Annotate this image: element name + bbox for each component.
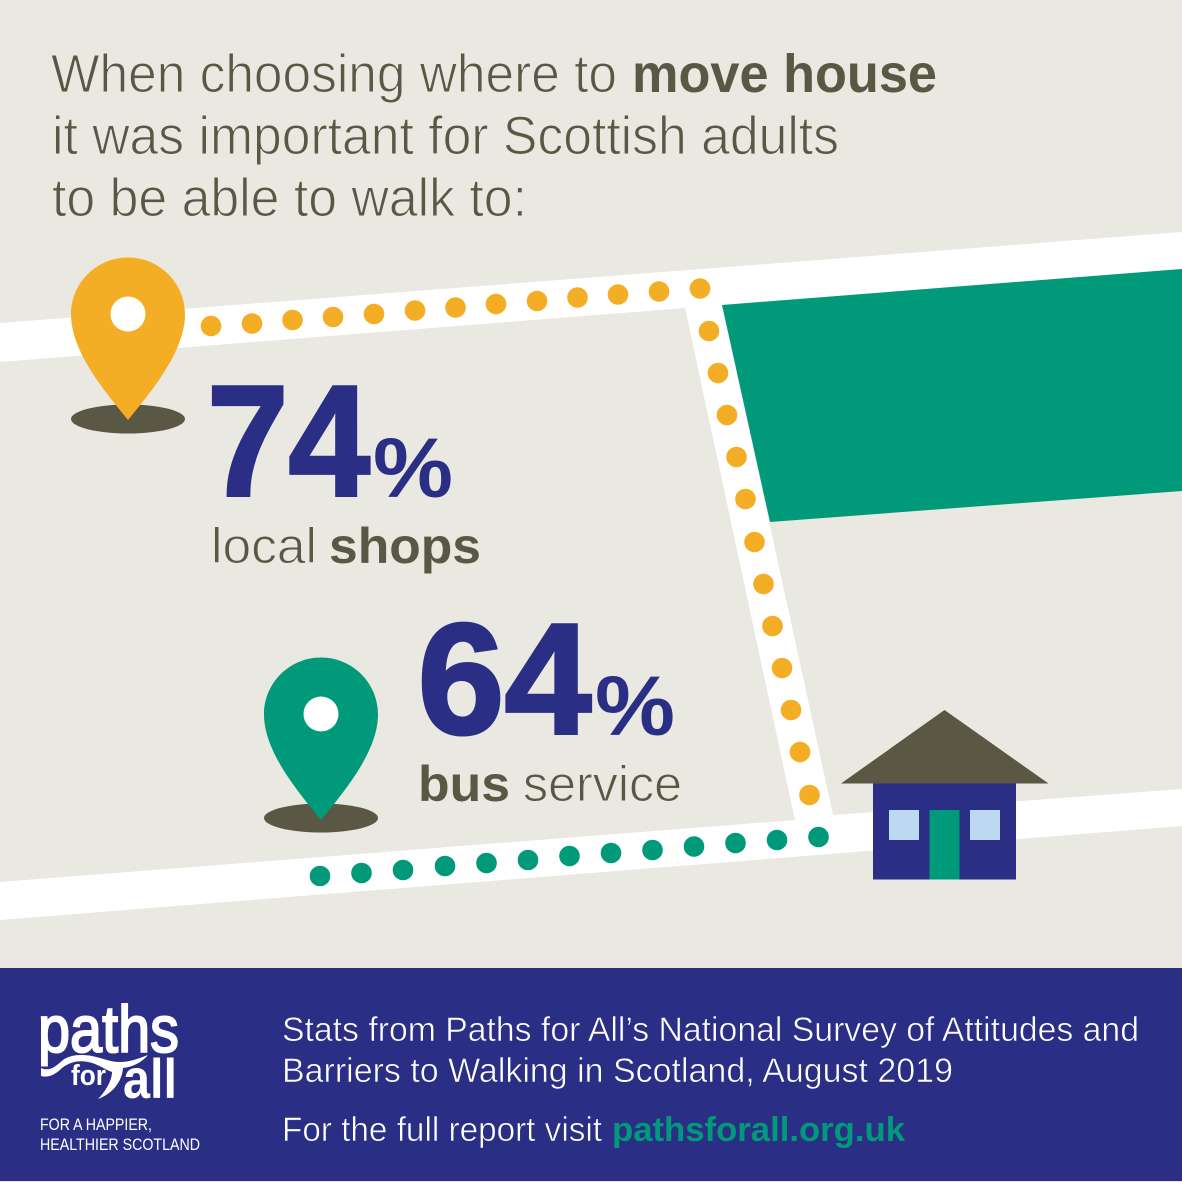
source text: For the full report visit <box>282 1111 603 1149</box>
logo: Paths for All: for <box>71 1060 106 1092</box>
statistic: 74% local shops: % <box>373 421 453 515</box>
icon: orange map pin <box>71 258 185 434</box>
logo tagline: HEALTHIER SCOTLAND <box>40 1136 200 1154</box>
logo: Paths for All: all <box>123 1047 177 1110</box>
source text: Barriers to Walking in Scotland, August 2019 <box>282 1052 953 1090</box>
source text: Stats from Paths for All’s National Survey of Attitudes and <box>282 1011 1139 1049</box>
logo tagline: FOR A HAPPIER, <box>40 1116 152 1134</box>
footer band <box>0 968 1182 1182</box>
statistic: 64% bus service: % <box>595 659 675 753</box>
road network <box>0 232 1182 920</box>
statistic: 74% local shops: 74 <box>207 354 370 530</box>
green park area <box>722 269 1182 522</box>
statistic: 74% local shops <box>207 354 481 574</box>
source text: pathsforall.org.uk <box>612 1111 905 1149</box>
statistic: 64% bus service <box>418 592 682 812</box>
logo: Paths for All <box>38 992 179 1110</box>
logo: Paths for All: paths <box>38 992 179 1066</box>
icon: house <box>841 710 1048 880</box>
orange dotted route <box>201 278 820 805</box>
statistic: 64% bus service: bus <box>418 756 510 812</box>
statistic: 74% local shops: local <box>211 518 317 574</box>
green dotted route <box>310 827 829 886</box>
logo tagline <box>40 1116 200 1154</box>
source text <box>282 1011 1139 1149</box>
statistic: 64% bus service: service <box>523 756 682 812</box>
title: it was important for Scottish adults <box>52 106 839 166</box>
statistic: 64% bus service: 64 <box>418 592 592 768</box>
title <box>51 44 937 228</box>
title: to be able to walk to: <box>52 168 527 228</box>
statistic: 74% local shops: shops <box>329 518 481 574</box>
title: move house <box>632 44 937 104</box>
title: When choosing where to <box>51 44 617 104</box>
icon: green map pin <box>264 658 378 832</box>
